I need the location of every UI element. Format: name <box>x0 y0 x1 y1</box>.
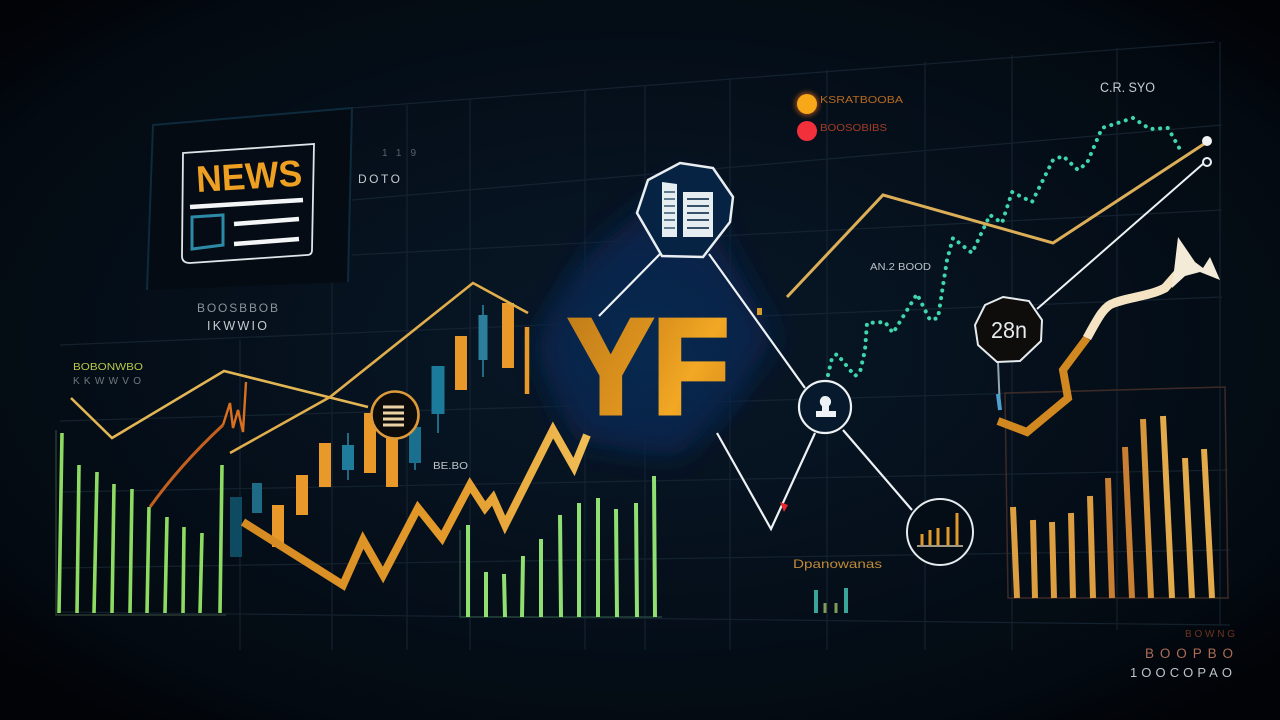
central glow <box>532 175 775 463</box>
legend: top: KSRATBOOBA <box>820 95 903 106</box>
bottom right caption: BOWNG <box>1185 629 1235 640</box>
label: left chart <box>73 361 143 387</box>
label center: BE.BO <box>433 460 468 472</box>
small label: data <box>358 148 416 186</box>
icon: news card <box>182 144 314 263</box>
gold line right <box>787 142 1207 297</box>
label mid right: AN.2 BOOD <box>870 261 931 273</box>
caption under news: BOOSBBOB <box>197 301 278 315</box>
legend: top: BOOSOBIBS <box>820 123 887 134</box>
icon: news card: NEWS <box>195 153 303 200</box>
label under chart node: Dpanowanas <box>793 557 882 571</box>
zigzag gold line <box>243 430 587 585</box>
network lines <box>599 254 912 529</box>
icon: right badge <box>975 297 1042 410</box>
small label: data: 119 <box>382 148 416 159</box>
icon: top building node <box>637 163 733 257</box>
bar chart: left green <box>56 430 226 615</box>
dotted teal line <box>828 118 1182 376</box>
title: YF: YF <box>569 291 729 442</box>
accent mark near YF <box>757 308 762 315</box>
legend: top <box>795 92 903 141</box>
bar chart: right orange <box>1005 387 1228 598</box>
small label: data: DOTO <box>358 172 400 186</box>
label: left chart: KKWWVO <box>73 376 141 387</box>
bottom right caption: 1OOCOPAO <box>1130 665 1232 680</box>
label: left chart: BOBONWBO <box>73 361 143 373</box>
icon: right badge: 28n <box>991 317 1027 343</box>
gold line left <box>71 283 528 453</box>
bar chart: center green <box>460 476 662 617</box>
bottom right caption: BOOPBO <box>1145 646 1233 661</box>
caption under news: IKWWIO <box>207 319 267 333</box>
icon: left coin node <box>372 392 418 438</box>
top right label: C.R. SYO <box>1100 80 1155 95</box>
white line right <box>1037 136 1212 309</box>
red marker <box>780 502 788 512</box>
bottom right caption <box>1130 629 1235 680</box>
icon: person node <box>799 381 851 433</box>
icon: chart node <box>907 499 973 565</box>
orange arrow <box>150 382 246 507</box>
flame line <box>998 237 1220 432</box>
candlestick chart <box>236 303 527 557</box>
news panel backdrop <box>147 108 352 290</box>
caption under news <box>197 301 278 333</box>
small bars <box>816 588 846 613</box>
